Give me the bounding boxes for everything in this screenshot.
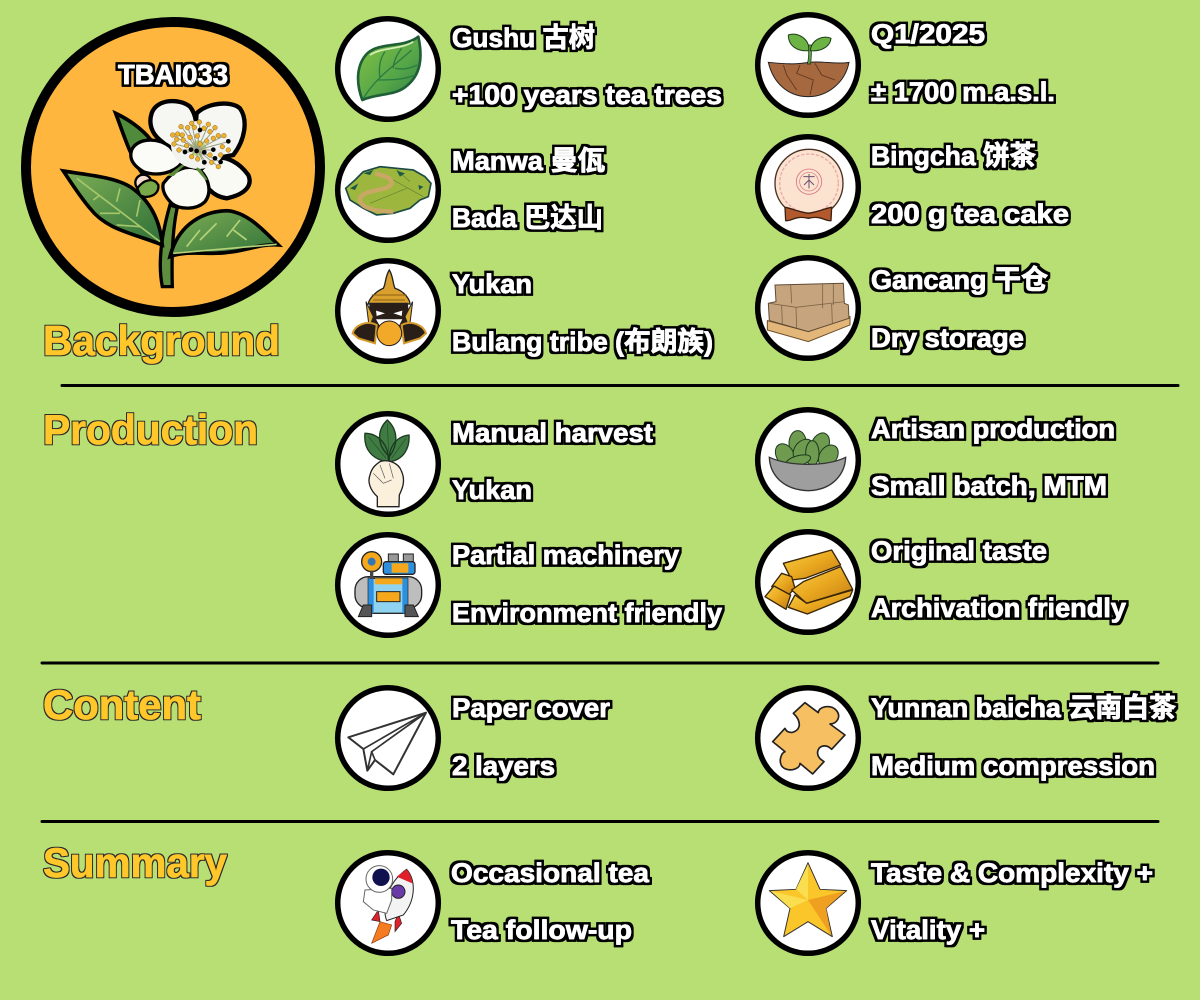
icon: yaksha guardian xyxy=(353,270,426,346)
item: original taste xyxy=(758,532,1126,632)
text: gancang: Gancang 干仓 xyxy=(871,265,1048,295)
text: partial machinery xyxy=(452,540,722,628)
text: manwa xyxy=(452,146,605,233)
text: paper cover xyxy=(452,693,611,781)
text: gushu: +100 years tea trees xyxy=(452,80,722,110)
badge code: TBAI033 xyxy=(118,59,228,90)
item: partial machinery xyxy=(338,535,722,635)
icon: hand with tea leaves xyxy=(365,420,409,507)
item: yunnan baicha xyxy=(758,688,1176,788)
item: gushu xyxy=(338,19,722,119)
item: yukan xyxy=(338,261,713,361)
icon: astronaut on rocket xyxy=(363,866,413,943)
text: original taste xyxy=(871,536,1126,623)
text: bingcha xyxy=(871,141,1069,229)
text: artisan production: Small batch, MTM xyxy=(871,471,1107,501)
icon: terrain map xyxy=(346,167,431,215)
text: taste and complexity xyxy=(871,858,1153,945)
panel: background xyxy=(26,15,1069,364)
text: original taste: Original taste xyxy=(871,536,1047,566)
heading: content: Content xyxy=(43,681,201,728)
item: bingcha xyxy=(758,137,1069,237)
item: manual harvest xyxy=(338,414,653,514)
text: manual harvest xyxy=(452,418,653,505)
icon: gold bars xyxy=(765,550,853,614)
text: yukan: Yukan xyxy=(452,269,532,299)
text: bingcha: 200 g tea cake xyxy=(871,199,1069,229)
text: paper cover: Paper cover xyxy=(452,693,611,723)
text: taste and complexity: Vitality + xyxy=(871,915,985,945)
icon: pallet of boxes xyxy=(767,283,850,342)
text: harvest date xyxy=(871,19,1055,107)
text: partial machinery: Environment friendly xyxy=(452,598,722,628)
text: partial machinery: Partial machinery xyxy=(452,540,679,570)
text: yunnan baicha: Yunnan baicha 云南白茶 xyxy=(871,693,1176,723)
text: gushu: Gushu 古树 xyxy=(452,23,595,53)
text: gushu xyxy=(452,23,722,110)
text: gancang: Dry storage xyxy=(871,323,1024,353)
icon: machine xyxy=(355,552,422,617)
text: manwa: Bada 巴达山 xyxy=(452,203,603,233)
item: artisan production xyxy=(758,410,1115,510)
panel: production xyxy=(43,406,1126,635)
text: taste and complexity: Taste & Complexity + xyxy=(871,858,1153,888)
item: gancang xyxy=(758,258,1048,358)
text: manual harvest: Manual harvest xyxy=(452,418,653,448)
heading: background: Background xyxy=(43,317,280,364)
text: original taste: Archivation friendly xyxy=(871,593,1126,623)
icon: puzzle piece xyxy=(773,703,845,774)
item: paper cover xyxy=(338,688,611,788)
text: bingcha: Bingcha 饼茶 xyxy=(871,141,1036,171)
item: harvest date xyxy=(758,15,1055,115)
text: manwa: Manwa 曼佤 xyxy=(452,146,605,176)
text: artisan production: Artisan production xyxy=(871,414,1115,444)
heading: summary: Summary xyxy=(43,839,228,886)
item: manwa xyxy=(338,140,605,240)
icon: green leaf xyxy=(358,37,421,100)
text: occasional tea: Occasional tea xyxy=(451,858,650,888)
text: artisan production xyxy=(871,414,1115,501)
icon: tea flower xyxy=(63,101,278,287)
panel: content xyxy=(43,681,1176,788)
text: gancang xyxy=(871,265,1048,353)
text: paper cover: 2 layers xyxy=(452,751,555,781)
icon: tea cake xyxy=(775,149,843,221)
text: yunnan baicha xyxy=(871,693,1176,781)
text: yukan: Bulang tribe (布朗族) xyxy=(452,327,713,357)
text: occasional tea: Tea follow-up xyxy=(451,915,632,945)
item: occasional tea xyxy=(338,853,650,953)
item: taste and complexity xyxy=(758,853,1153,953)
text: harvest date: ± 1700 m.a.s.l. xyxy=(871,77,1055,107)
panel: summary xyxy=(43,839,1153,953)
text: yunnan baicha: Medium compression xyxy=(871,751,1155,781)
icon: sprout in soil xyxy=(768,34,849,97)
icon: gold star xyxy=(769,863,847,937)
icon: paper plane xyxy=(348,713,426,774)
badge: TBAI033 flower xyxy=(26,22,320,312)
text: yukan xyxy=(452,269,713,357)
text: manual harvest: Yukan xyxy=(452,475,532,505)
icon: bowl of leaves xyxy=(769,430,846,491)
text: occasional tea xyxy=(451,858,650,945)
text: harvest date: Q1/2025 xyxy=(871,19,985,49)
heading: production: Production xyxy=(43,406,258,453)
